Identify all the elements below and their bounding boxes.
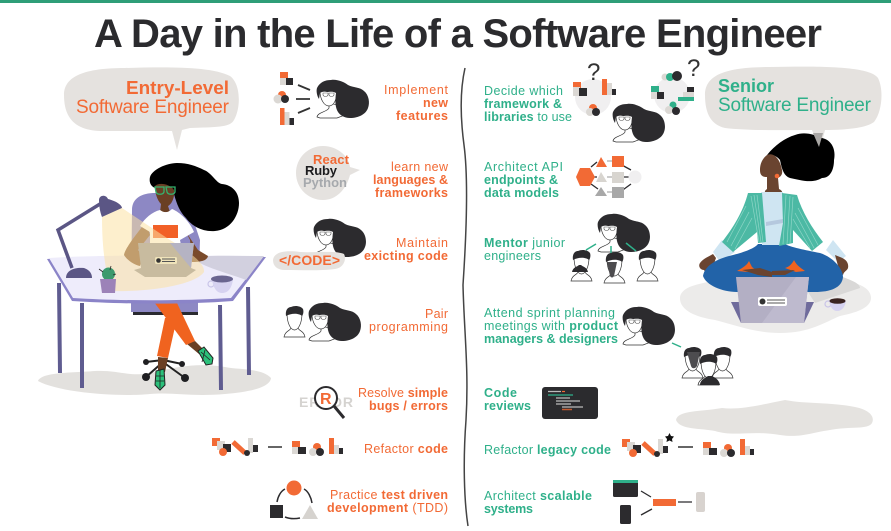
panel: senior speech bubble: Senior <box>718 76 774 96</box>
text: architect api: Architect API <box>484 160 563 174</box>
text: attend sprint planning: meetings with product <box>484 319 619 333</box>
icon: scalable system <box>613 480 705 524</box>
text: implement new features: features <box>396 109 448 123</box>
jacket <box>722 193 823 252</box>
desk legs <box>59 283 249 390</box>
icon: framework choice <box>573 55 700 142</box>
earring <box>775 174 779 178</box>
icon: languages bubble: React <box>313 152 350 167</box>
text: implement new features: Implement <box>384 83 449 97</box>
panel: entry-level illustration <box>38 163 271 395</box>
cactus <box>99 266 116 293</box>
blue legs <box>703 244 843 292</box>
desk <box>47 256 266 304</box>
text: decide framework: libraries to use <box>484 110 572 124</box>
text: mentor junior engineers: engineers <box>484 249 541 263</box>
icon: languages bubble: Ruby <box>305 163 338 178</box>
text: code reviews <box>484 386 531 413</box>
icon: languages bubble <box>296 146 360 200</box>
icon: refactor legacy shapes <box>622 433 754 457</box>
shirt <box>140 209 194 245</box>
text: resolve simple bugs <box>358 386 448 413</box>
hair <box>767 133 834 181</box>
icon: mentor group <box>571 214 658 283</box>
panel: entry-level speech bubble: Entry-Level <box>126 78 229 99</box>
top accent bar <box>0 0 891 3</box>
panel: senior illustration <box>680 133 871 333</box>
icon: code blob: </CODE> <box>279 252 340 268</box>
text: test driven development: development (TDD) <box>327 501 448 515</box>
icon: languages bubble: Python <box>303 175 347 190</box>
icon: api diagram <box>576 156 642 198</box>
text: architect api: data models <box>484 186 559 200</box>
icon: test driven cycle <box>270 480 318 519</box>
icon: error magnifier <box>299 387 353 418</box>
text: attend sprint planning: Attend sprint planning <box>484 306 615 320</box>
arms <box>124 222 208 266</box>
light cone <box>102 208 204 291</box>
chair <box>131 193 200 382</box>
panel: senior speech bubble <box>705 67 881 150</box>
inner top <box>761 192 784 245</box>
text: pair programming: Pair <box>425 307 448 321</box>
text: maintain exicting code <box>364 236 448 263</box>
text: learn new languages and frameworks: learn new <box>391 160 449 174</box>
text: learn new languages and frameworks: frameworks <box>375 186 448 200</box>
icon: shapes to head, implement features <box>274 72 369 125</box>
text: attend sprint planning <box>484 306 619 346</box>
laptop <box>134 243 196 277</box>
text: implement new features <box>384 83 449 123</box>
shirt graphic <box>153 225 178 238</box>
text: code reviews: Code <box>484 386 517 400</box>
icon: error magnifier: ERROR <box>299 394 353 410</box>
text: maintain exicting code: Maintain <box>396 236 448 250</box>
icon: framework choice: ? <box>687 55 700 82</box>
hands <box>699 254 848 275</box>
text: architect api <box>484 160 563 200</box>
title: A Day in the Life of a Software Engineer <box>94 12 822 56</box>
text: implement new features: new <box>423 96 448 110</box>
text: learn new languages and frameworks <box>373 160 449 200</box>
text: test driven development <box>327 488 448 515</box>
icon: error magnifier: R <box>320 391 332 408</box>
text: learn new languages and frameworks: languages & <box>373 173 448 187</box>
panel: entry-level speech bubble: Software Engineer <box>76 97 230 118</box>
glasses <box>155 187 175 194</box>
coffee cup <box>825 298 846 311</box>
face <box>155 184 174 212</box>
text: code reviews: reviews <box>484 399 531 413</box>
text: refactor legacy code: Refactor legacy code <box>484 443 611 457</box>
icon: pair programming <box>284 303 361 341</box>
text: decide framework: framework & <box>484 97 562 111</box>
panel: senior speech bubble: Software Engineer <box>718 95 872 116</box>
text: attend sprint planning: managers & designers <box>484 332 618 346</box>
text: architect api: endpoints & <box>484 173 558 187</box>
text: mentor junior engineers <box>484 236 565 263</box>
text: pair programming <box>369 307 448 334</box>
divider line <box>461 68 468 526</box>
icon: refactor shapes <box>212 438 343 456</box>
cloud <box>680 280 871 333</box>
hair <box>150 163 239 231</box>
legs and feet <box>154 302 213 390</box>
desk lamp <box>58 196 122 278</box>
text: pair programming: programming <box>369 320 448 334</box>
text: test driven development: Practice test driven <box>330 488 448 502</box>
text: decide framework: Decide which <box>484 84 563 98</box>
text: mentor junior engineers: Mentor junior <box>484 236 565 250</box>
speech tail tip over hair <box>813 133 823 147</box>
text: refactor code: Refactor code <box>364 442 448 456</box>
text: resolve simple bugs: Resolve simple <box>358 386 448 400</box>
panel: entry-level speech bubble <box>64 67 239 150</box>
arms <box>713 240 846 262</box>
cloud shape lower right <box>676 400 873 436</box>
text: architect scalable systems <box>484 489 592 516</box>
text: decide framework <box>484 84 572 124</box>
text: architect scalable systems: systems <box>484 502 533 516</box>
icon: framework choice: ? <box>587 59 600 86</box>
icon: planning meeting <box>623 307 733 385</box>
laptop <box>731 277 814 323</box>
coffee cup <box>208 276 233 293</box>
text: resolve simple bugs: bugs / errors <box>369 399 448 413</box>
floor shadow <box>38 365 271 395</box>
orange shoes and feet <box>737 260 805 277</box>
face and neck <box>760 154 782 195</box>
text: architect scalable systems: Architect scalable <box>484 489 592 503</box>
icon: code blob <box>273 219 366 270</box>
floor shadow <box>808 277 860 303</box>
text: maintain exicting code: exicting code <box>364 249 448 263</box>
icon: code editor <box>542 387 598 419</box>
